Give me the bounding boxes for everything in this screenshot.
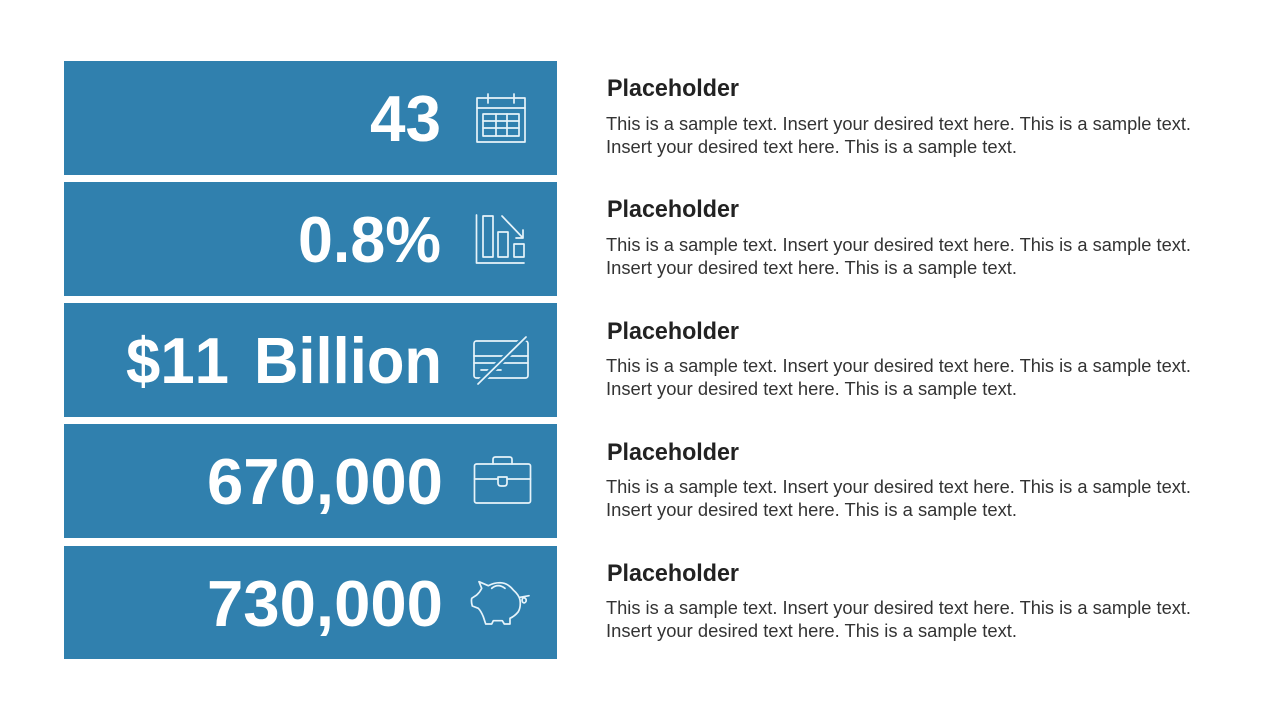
row 4: 670,000 <box>64 424 1191 538</box>
heading 2: Placeholder <box>607 196 739 223</box>
description 3: This is a sample text. Insert your desired text here. This is a sample text. <box>606 355 1191 376</box>
icon: crossed-out credit card <box>474 337 528 384</box>
description 5: Insert your desired text here. This is a sample text. <box>606 620 1017 641</box>
stat number 0.8%: 0.8% <box>298 203 441 276</box>
description 2: Insert your desired text here. This is a sample text. <box>606 257 1017 278</box>
stat number 730,000: 730,000 <box>207 567 443 640</box>
panel: stat bar 2 <box>64 182 557 296</box>
stat number 670,000: 670,000 <box>207 445 443 518</box>
stat number 43: 43 <box>370 82 441 155</box>
panel: stat bar 3 <box>64 303 557 417</box>
row 3: $11 Billion <box>64 303 1191 417</box>
stat number $11 Billion: Billion <box>254 324 442 397</box>
icon: calendar <box>477 94 525 142</box>
description 4: This is a sample text. Insert your desired text here. This is a sample text. <box>606 476 1191 497</box>
row 1: 43 <box>64 61 1191 175</box>
icon: piggy bank <box>471 582 529 624</box>
description 1: This is a sample text. Insert your desired text here. This is a sample text. <box>606 113 1191 134</box>
stat number $11 Billion: $11 <box>126 324 229 397</box>
icon: briefcase <box>474 457 530 503</box>
description 1: Insert your desired text here. This is a sample text. <box>606 136 1017 157</box>
heading 1: Placeholder <box>607 75 739 102</box>
row 2: 0.8% <box>64 182 1191 296</box>
description 3: Insert your desired text here. This is a sample text. <box>606 378 1017 399</box>
icon: declining bar chart <box>476 215 524 263</box>
description 2: This is a sample text. Insert your desired text here. This is a sample text. <box>606 234 1191 255</box>
description 4: Insert your desired text here. This is a sample text. <box>606 499 1017 520</box>
row 5: 730,000 <box>64 546 1191 659</box>
heading 5: Placeholder <box>607 560 739 587</box>
description 5: This is a sample text. Insert your desired text here. This is a sample text. <box>606 597 1191 618</box>
panel: stat bar 1 <box>64 61 557 175</box>
heading 4: Placeholder <box>607 439 739 466</box>
panel: stat bar 5 <box>64 546 557 659</box>
panel: stat bar 4 <box>64 424 557 538</box>
heading 3: Placeholder <box>607 318 739 345</box>
